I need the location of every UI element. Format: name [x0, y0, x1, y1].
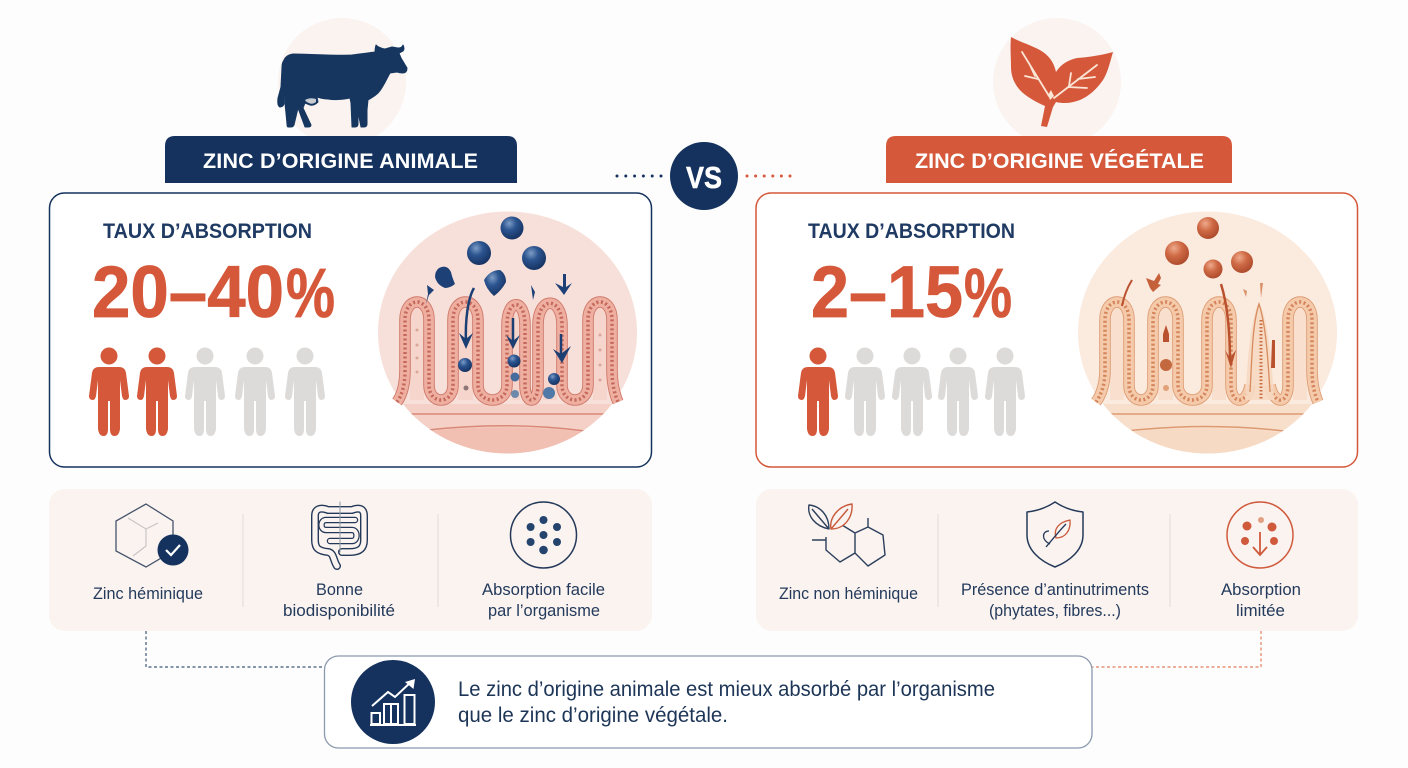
- label: absorption facile: [482, 581, 605, 620]
- label: présence d'antinutriments: Présence d’antinutriments: [961, 581, 1149, 599]
- panel: conclusion: [324, 656, 1092, 748]
- people pictogram: 2 of 5: [89, 348, 325, 436]
- label: zinc héminique: Zinc héminique: [93, 585, 203, 603]
- conclusion text: que le zinc d’origine végétale.: [458, 704, 728, 727]
- label: bonne biodisponibilité: Bonne: [316, 581, 363, 599]
- absorption rate: 2–15: [811, 252, 963, 333]
- connector: plant to conclusion: [1092, 631, 1261, 667]
- header: zinc d'origine végétale: [886, 136, 1232, 183]
- icon: intestine: [315, 502, 364, 566]
- icon: rising chart: [351, 660, 435, 744]
- absorption rate: 20–40: [92, 252, 284, 333]
- vs badge: [617, 142, 791, 210]
- header: zinc d'origine végétale: ZINC D’ORIGINE VÉGÉTALE: [915, 148, 1204, 173]
- connector: animal to conclusion: [146, 631, 324, 667]
- conclusion text: Le zinc d’origine animale est mieux absorbé par l’organisme: [458, 678, 995, 701]
- header: zinc d'origine animale: [165, 136, 517, 183]
- panel: plant zinc properties: [756, 489, 1358, 631]
- panel: plant absorption: [756, 193, 1358, 470]
- label: bonne biodisponibilité: biodisponibilité: [283, 602, 395, 620]
- absorption label: TAUX D’ABSORPTION: [808, 220, 1015, 243]
- label: absorption limitée: Absorption: [1221, 581, 1301, 599]
- label: absorption limitée: limitée: [1236, 602, 1285, 620]
- absorption label: TAUX D’ABSORPTION: [103, 220, 312, 243]
- label: absorption limitée: [1221, 581, 1301, 620]
- absorption rate: %: [964, 254, 1012, 332]
- header: zinc d'origine animale: ZINC D’ORIGINE ANIMALE: [203, 149, 478, 173]
- illustration: intestinal villi with navy zinc: [375, 212, 640, 470]
- icon: limited absorption circle: [1227, 502, 1293, 568]
- label: bonne biodisponibilité: [283, 581, 395, 620]
- icon: shield with leaf: [1027, 502, 1083, 567]
- icon: leaves and hexagons: [809, 504, 885, 566]
- icon: plant leaves: [993, 18, 1121, 146]
- panel: animal zinc properties: [49, 489, 652, 631]
- illustration: intestinal villi with orange zinc: [1075, 212, 1340, 470]
- label: présence d'antinutriments: (phytates, fibres...): [989, 602, 1121, 620]
- label: zinc non héminique: Zinc non héminique: [779, 585, 918, 603]
- absorption rate: %: [286, 254, 335, 332]
- label: absorption facile: Absorption facile: [482, 581, 605, 599]
- label: absorption facile: par l’organisme: [488, 602, 600, 620]
- label: présence d'antinutriments: [961, 581, 1149, 620]
- people pictogram: 1 of 5: [798, 348, 1025, 436]
- conclusion text: [458, 678, 995, 727]
- panel: animal absorption: [50, 193, 652, 470]
- icon: hexagon with check: [116, 504, 188, 567]
- icon: dots in circle: [510, 502, 576, 568]
- vs badge: VS: [686, 160, 722, 195]
- icon: cow: [278, 18, 407, 146]
